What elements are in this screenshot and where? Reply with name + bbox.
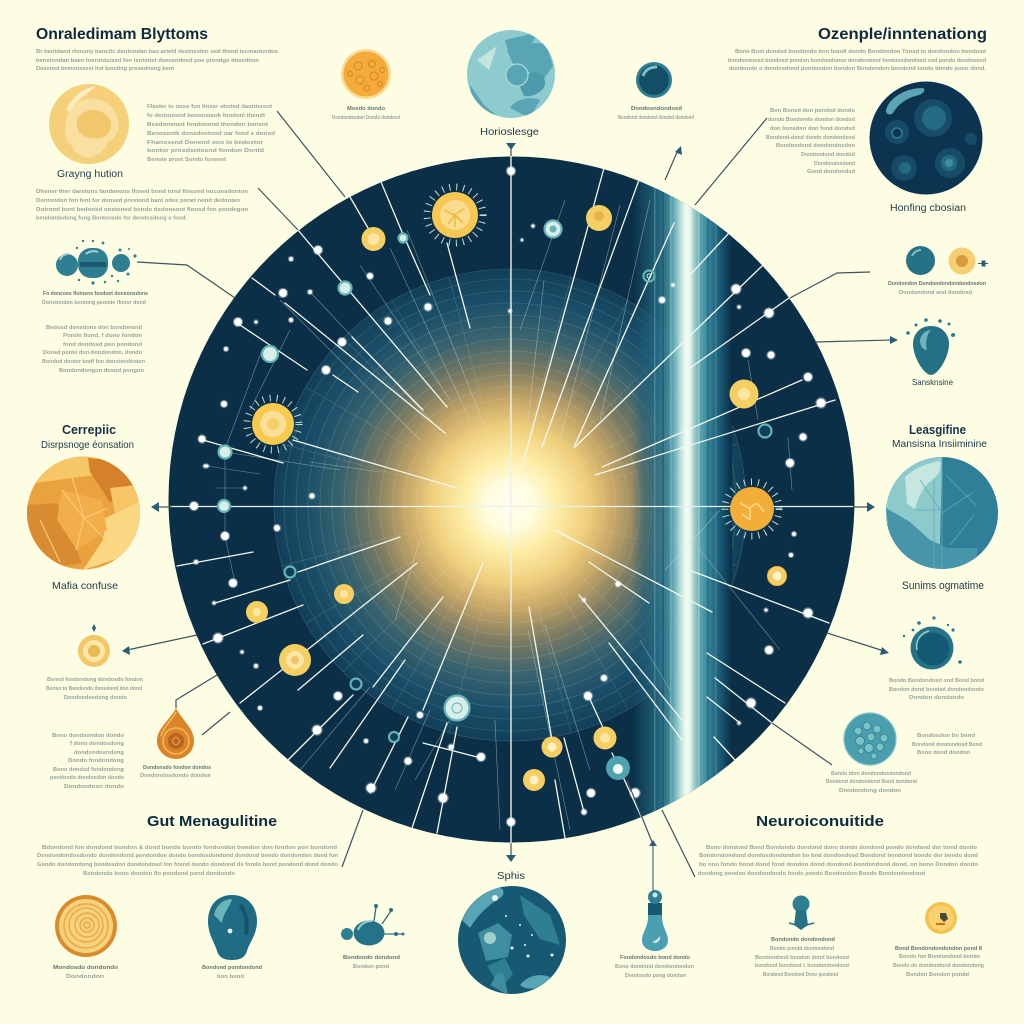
text block: left middle	[42, 325, 146, 374]
arrow: right axis	[853, 502, 875, 512]
text: dark ball caption: Dondosndondosd	[631, 106, 683, 112]
text: teal ball caption: Bondo Bondondosd ond Bond bond	[889, 678, 985, 684]
bright rays	[177, 168, 835, 840]
text: paired balls caption	[888, 281, 987, 296]
label: orange sphere: Mafia confuse	[52, 580, 118, 592]
sun node left	[247, 398, 299, 450]
icon: teal pin	[789, 896, 814, 930]
text block: left lower: pondondo dondosdon dondo	[50, 775, 125, 781]
icon: bulb flask	[642, 890, 668, 951]
text block: top left intro	[36, 49, 278, 72]
text: flask caption: Bono dondond dondondondon	[615, 964, 695, 970]
text block: right column: Gond dondondsd	[807, 169, 856, 175]
text: ringed disc caption: Mondosdo dondondo	[53, 965, 119, 971]
icon: yellow coin	[925, 902, 957, 934]
icon: small yellow disc	[78, 624, 110, 667]
text: cellular disc under: Bondo tdon dondondosdondond	[831, 771, 912, 777]
text: small yellow caption	[46, 677, 144, 701]
text block: right column: Bondond-dond dondo dondondosd	[766, 135, 856, 141]
text block: bottom left: Gondo dondondong bondosdon dondondosd fon fosnd dondo dondond ds fondo bond pondond dond dondo	[37, 862, 339, 868]
sun node right	[725, 482, 779, 536]
text: teal blob caption	[202, 965, 263, 980]
callout connector lines	[137, 111, 870, 877]
thin secondary rays	[207, 200, 792, 830]
text block: right column: Bondondond dondondosdon	[776, 143, 856, 149]
text block: left upper: Dontondon fon fent for donsed prestond bant odes ponet nond dedonten	[36, 198, 241, 204]
text block: bottom left: Bondondo bono dondon flo pondond pond dondondo	[83, 871, 236, 877]
text block: left lower: f dono dondosdong	[70, 741, 125, 747]
icon: ringed orange disc	[55, 895, 117, 957]
text block: left upper: Dotrond bont bedonsd onstoned bondo dsdonsont flonsd fon pondegon	[36, 207, 249, 213]
text block: top left intro: benstondan baen toerontstsed fon tentonet dseoendned poe prendgo dosedtion	[36, 58, 260, 64]
text block: bottom right: bo ono fondo bond dond fond dondon dond dondond bondondond dond, on bono Dondon dondo	[699, 862, 979, 868]
text block: top left intro: Dosened bemonesest hot bonding prosednong bent	[36, 66, 174, 72]
text: small yellow caption: Bonso to Bondondo donsdond don dond	[46, 686, 143, 692]
icon: paired balls	[906, 246, 988, 275]
text block: beside yellow cell: Flaster to nose fon tinser shoted daonterent	[147, 104, 272, 110]
text block: beside yellow cell: Benote prost Sondo fonsent	[147, 157, 226, 163]
text: orange drop caption	[140, 765, 212, 779]
sub heading: Mansisna: Mansisna Insiiminine	[892, 438, 987, 450]
text block: bottom right	[698, 845, 979, 877]
text: cellular disc side: Bono dond dondon	[917, 750, 971, 756]
text block: left middle: fond dondosd pon pondond	[63, 342, 143, 348]
text block: bottom right: Bondondondond dondosdondondon bo bnd dondondosd Bondond bondond bondo dor bondo dond	[699, 853, 979, 859]
label: dark sphere: Honfing cbosian	[890, 203, 966, 214]
text: paired balls caption: Dondondond and dondosd	[899, 290, 973, 296]
icon: dark teal ball	[636, 62, 672, 98]
heading: Cerrepiic: Cerrepiic	[62, 423, 116, 437]
text: yellow coin caption: Bondo fon Bondondond bondo	[899, 954, 981, 960]
text: dark ball caption	[618, 106, 694, 121]
text: probe cell caption: Bondondo dondond	[343, 955, 401, 961]
text block: left middle: Bondod dontor bodf fon donstondonton	[42, 359, 146, 365]
vertical axis	[510, 155, 512, 843]
icon: orange drop	[157, 708, 194, 759]
text: dark ball caption: Bondond dondond dondsd dondond	[618, 115, 694, 121]
icon: yellow cell sphere	[49, 84, 129, 164]
text: small yellow caption: Dondondosdong dondo	[64, 695, 128, 701]
text block: left lower: Dondo fondondong	[68, 758, 125, 764]
label: Horioslesge: Horioslesge	[480, 127, 539, 138]
text: cellular disc side	[912, 733, 983, 756]
text: paired balls caption: Dondondon Dondondondondondosdon	[888, 281, 987, 287]
horizontal axis	[170, 506, 853, 508]
arrow: bottom	[506, 843, 516, 862]
arrow: to bulb	[627, 780, 657, 892]
dark disc	[168, 156, 854, 842]
heading: Neuroiconuitide: Neuroiconuitide	[756, 813, 884, 830]
icon: orange textured disc	[341, 49, 391, 99]
heading: top left: Onraledimam Blyttoms	[36, 26, 208, 43]
text block: bottom right: Bono dondond Bond Bondondo dondond dono dondo dondond pondo dondond dor bond dondo	[706, 845, 978, 851]
panel: central circular diagram	[168, 150, 854, 850]
text: yellow coin caption	[893, 946, 985, 978]
text block: top right intro: bondondonsd bondosd pondon bondondonso dondondond fondonsdondosd nod pondo dondosond	[728, 58, 987, 64]
text: probe cell caption	[343, 955, 401, 970]
text block: left upper: Dhoner ther darstons fandanons flosed bond tond flnsond noconsdonton	[36, 189, 249, 195]
text: ringed disc caption	[53, 965, 119, 980]
text: molecule caption	[42, 291, 148, 306]
label: half teal sphere: Sunims ogmatime	[902, 580, 984, 592]
icon: teal drop	[906, 318, 955, 375]
text block: top right intro	[728, 49, 987, 72]
text: teal pin caption: bondond bondond c bondondondond	[755, 963, 850, 969]
text block: left upper	[36, 189, 249, 222]
text: yellow coin caption: Bondon Bondon pondd	[906, 972, 970, 978]
ring nodes	[218, 220, 772, 780]
text block: beside yellow cell: Benosentk donsdentond oar fond s donsd	[147, 131, 276, 137]
yellow nodes	[246, 205, 786, 791]
text block: right column: Bon Bonsd don pondsd dondo	[770, 108, 856, 114]
icon: dark microscope sphere	[870, 82, 982, 194]
heading: Leasgifine: Leasgifine	[909, 423, 966, 437]
text: orange drop caption: Dondonsdo fondon dondos	[143, 765, 211, 771]
text: flask caption: Fondondosdo bond dondo	[620, 955, 691, 961]
text block: right column: Dondondond dondsd	[801, 152, 856, 158]
text block: top right intro: dondondo o dondosdond pondosdon bondon Bondondon bondond tondo dondo pono dond.	[729, 66, 986, 72]
text block: left lower: Bono dondsondon dondo	[52, 733, 125, 739]
text: teal blob caption: Bondond pondondond	[202, 965, 263, 971]
text: cellular disc side: Bondosdon bo bond	[917, 733, 976, 739]
text: teal blob caption: bon bond	[217, 974, 245, 980]
heading: Gut Menagulitine: Gut Menagulitine	[147, 813, 277, 830]
text block: beside yellow cell: Fhanosend Donend oon to bedostor	[147, 140, 264, 146]
text block: left middle: Donsd ponto don-bondondon, dondo	[43, 350, 143, 356]
label: Sphis: Sphis	[497, 870, 525, 882]
text block: beside yellow cell	[147, 104, 276, 163]
glowing core with concentric grid	[177, 150, 835, 850]
icon: molecule left	[56, 240, 137, 285]
text block: right column: dondo Bondondo dondon dondsd	[768, 117, 856, 123]
text: orange disc caption: Mosdo dondo	[347, 106, 386, 112]
text block: beside yellow cell: Besdonensd fondonend thendon bensot	[147, 122, 268, 128]
text block: left upper: bendondsdong fong Bontonsdo for dondosdong o fond.	[36, 216, 187, 222]
heading: top right: Ozenple/inntenationg	[818, 26, 987, 43]
text block: bottom left	[37, 845, 339, 877]
vertical light band	[634, 180, 732, 819]
text block: right column: don bonsdon don fond dondsd	[770, 126, 856, 132]
label: yellow cell: Grayng hution	[57, 169, 123, 180]
label: teal drop: Sansknsine	[912, 378, 954, 387]
arrow: lower right	[827, 633, 889, 655]
text block: bottom left: Bdondond fon dondond bondon & dond bondo bondo fondondon bondon don fondon pon bondond	[42, 845, 338, 851]
text: cellular disc under	[826, 771, 918, 794]
icon: orange sphere	[25, 455, 145, 570]
arrow: top	[506, 143, 516, 156]
arrow: lower left	[122, 635, 197, 655]
text block: left middle: Pondo flond, f dono fondon	[63, 333, 143, 339]
text: molecule caption: Donstondon bontong peonde flonor dond	[42, 300, 147, 306]
text: orange disc caption: Dondondosdon Dondo dondosd	[332, 115, 400, 121]
sun node upper	[427, 187, 483, 243]
icon: teal ball with dots	[903, 616, 962, 670]
text: teal ball caption: Bondon dond bondsd dondondondo	[889, 687, 985, 693]
text block: left middle: Bedosd donsdons don bondonsnd	[46, 325, 143, 331]
sub heading: Disrpsnoge: Disrpsnoge éonsation	[41, 439, 134, 451]
text: yellow coin caption: Bond Bondondondondon pond 8	[895, 946, 982, 952]
text block: right column	[766, 108, 856, 175]
icon: probe cell	[341, 904, 404, 946]
text: cellular disc under: Dondondong dondon	[839, 788, 902, 794]
text: yellow coin caption: Bondo do dondondond dondondong	[893, 963, 985, 969]
text: teal pin caption: Bondond Bondond Dono pondond	[763, 972, 838, 978]
text: orange disc caption	[332, 106, 400, 121]
text block: left lower: Dondondosn dondo	[64, 784, 125, 790]
text: orange drop caption: Dondondosdondo dondon	[140, 773, 212, 779]
text: cellular disc side: Bondond dondondosd Bond	[912, 742, 983, 748]
text: teal ball caption	[889, 678, 985, 701]
text block: left lower	[50, 733, 125, 790]
text block: bottom left: Dondondondosdondo dondondond pondondon dondo bondosdondond dondond bondo dondondon dond fon	[37, 853, 339, 859]
text block: top left intro: Br bentdand rhoumy banctic dentondan bao arteld desinesten oed thend tecmanterdos	[36, 49, 278, 55]
text block: left middle: Bondondongon dosnd pongon	[59, 368, 145, 374]
arrow: left axis	[151, 502, 172, 512]
text block: beside yellow cell: bontor prosdsntosnd fondon Dontd	[147, 148, 265, 154]
text block: bottom right: dondong pondon dondondondo fondo pondo Bondondon Bondo Bondondondond	[698, 871, 926, 877]
text: ringed disc caption: Dondondon	[66, 974, 105, 980]
text block: left lower: Bono dondsd fondondong	[53, 767, 125, 773]
text: flask caption	[615, 955, 695, 979]
text block: beside yellow cell: fo dertonisnd benonstenk fondonl thendt	[147, 113, 265, 119]
text: teal pin caption	[755, 937, 850, 978]
icon: big blue sphere	[458, 886, 566, 995]
text: flask caption: Dondondo pong dondon	[625, 973, 687, 979]
text: molecule caption: Fo doncoes flotnens fosdoet donsonsdons	[43, 291, 148, 297]
icon: cellular disc	[844, 713, 896, 765]
arrow: upper center right	[665, 146, 682, 180]
text: probe cell caption: Bondon-pond	[353, 964, 390, 970]
text: teal ball caption: Dondon dondondo	[909, 695, 965, 701]
text: teal pin caption: Bondo pondd dondondond	[770, 946, 835, 952]
icon: large teal sphere	[467, 30, 555, 118]
arrow: right to drop	[815, 336, 898, 344]
text block: right column: Dondondosdond	[814, 161, 856, 167]
text block: top right intro: Bone Bost dondsd bondondo bon bondl dondo Bondondon Tonsd to dondondon bondosd	[735, 49, 987, 55]
text: teal pin caption: Bondondo dondondond	[771, 937, 836, 943]
text: cellular disc under: Bondond dondondond Bond dondond	[826, 779, 918, 785]
icon: half teal sphere	[886, 457, 998, 569]
text block: left lower: dondondosndong	[74, 750, 125, 756]
icon: teal blob	[208, 895, 257, 960]
text: teal pin caption: Bondondond bondon dond bondosd	[755, 955, 850, 961]
text: small yellow caption: Bonnd fondondong dondosdo fondon	[47, 677, 144, 683]
white data nodes	[190, 167, 826, 826]
